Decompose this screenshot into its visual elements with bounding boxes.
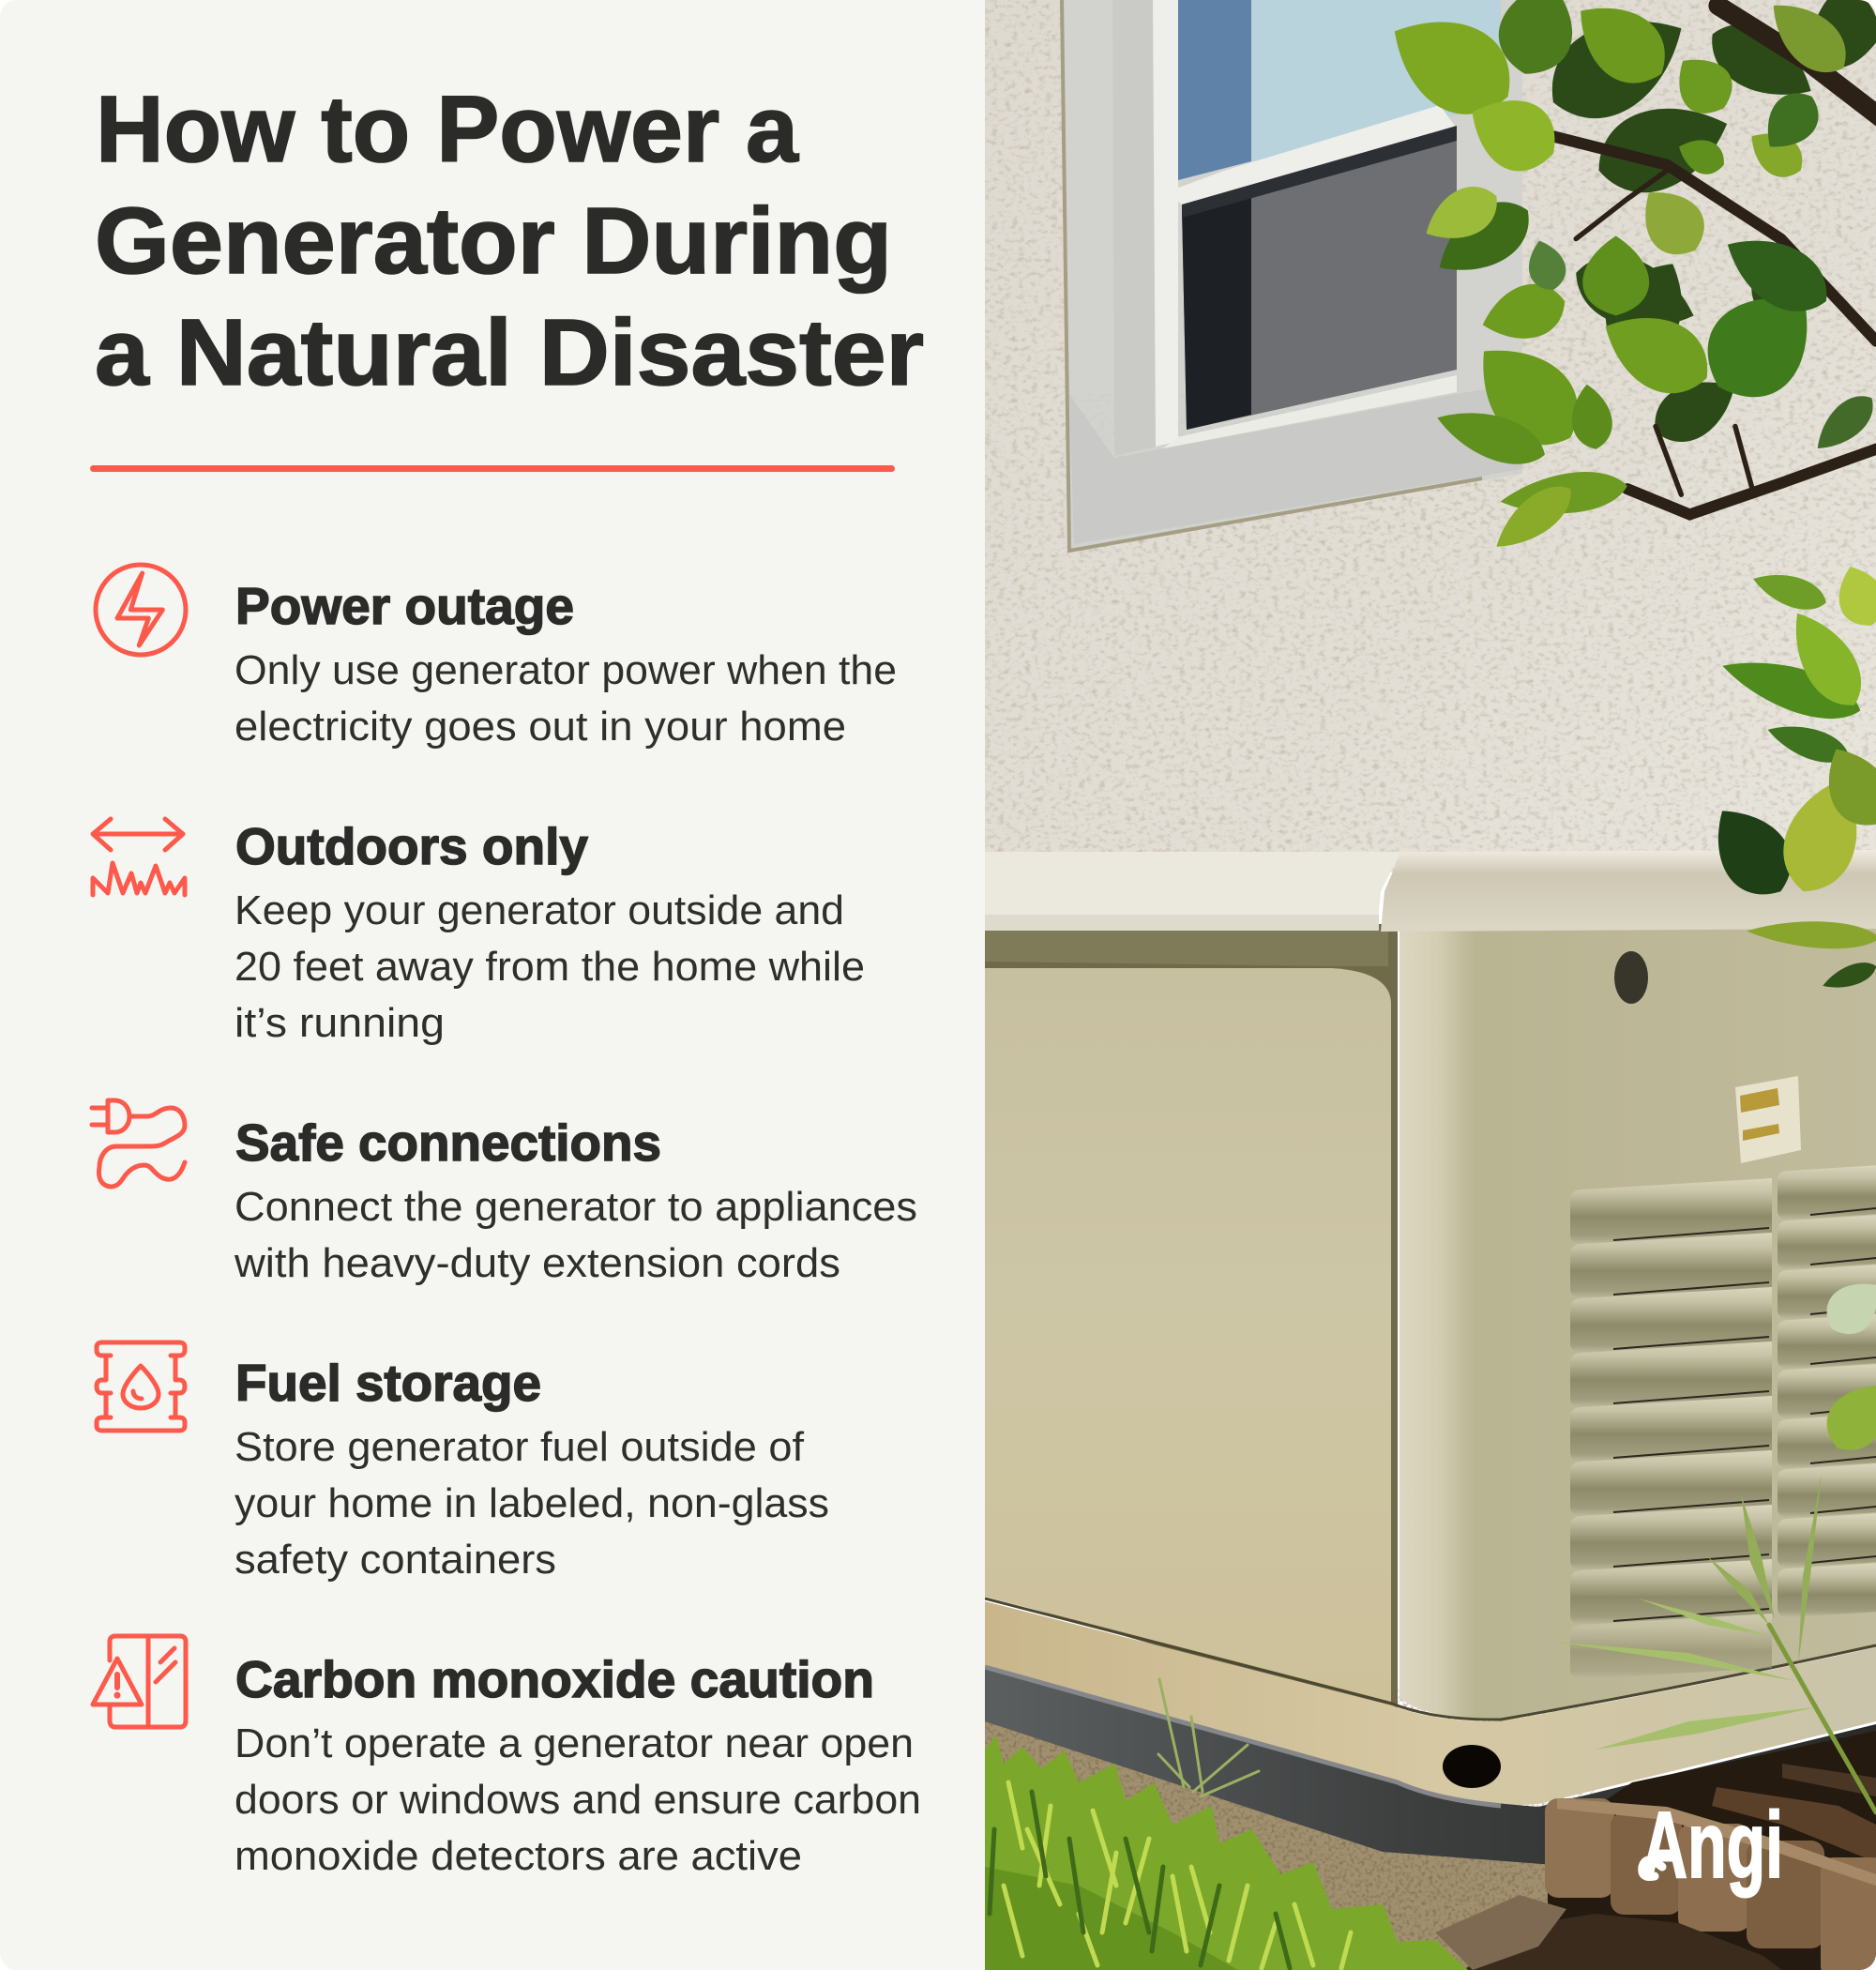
- icon: lightning bolt in circle: [96, 565, 186, 655]
- item: carbon monoxide caution: [93, 1636, 921, 1879]
- photo: dirt ground: [985, 1689, 1595, 1970]
- logo: Angi: Angi: [1642, 1793, 1783, 1898]
- title: How to Power a: [96, 77, 799, 182]
- text: safe connections description: [234, 1184, 917, 1286]
- text: outdoors only description: Keep your generator outside and: [234, 887, 844, 933]
- title: Generator During: [95, 189, 892, 294]
- item: fuel storage: [97, 1342, 829, 1583]
- text: carbon monoxide description: monoxide detectors are active: [234, 1833, 802, 1879]
- text: outdoors only description: [234, 887, 865, 1046]
- text: safe connections description: Connect the generator to appliances: [234, 1184, 917, 1230]
- photo: small grass plant: [1158, 1679, 1259, 1796]
- branches: [1553, 6, 1876, 514]
- icon: fuel barrel with drop: [97, 1342, 185, 1431]
- heading: carbon monoxide caution: Carbon monoxide caution: [235, 1650, 874, 1708]
- text: fuel storage description: safety containers: [234, 1537, 556, 1583]
- text: outdoors only description: it’s running: [234, 1000, 445, 1046]
- title divider rule: [90, 465, 895, 472]
- icon: distance arrow over ground: [93, 819, 185, 895]
- photo: tree leaves and branches: [1373, 0, 1876, 995]
- photo: window: [1062, 0, 1522, 551]
- heading: safe connections: Safe connections: [235, 1114, 661, 1172]
- panel: text column background: [0, 0, 985, 1970]
- photo: retaining blocks: [1435, 1731, 1876, 1970]
- text: power outage description: [234, 647, 897, 750]
- leaves: [1373, 0, 1876, 995]
- text: carbon monoxide description: doors or windows and ensure carbon: [234, 1777, 921, 1823]
- title: [97, 96, 923, 386]
- title: a Natural Disaster: [95, 300, 924, 405]
- text: fuel storage description: [234, 1424, 829, 1583]
- item: power outage: [96, 565, 897, 750]
- heading: fuel storage: Fuel storage: [235, 1354, 541, 1412]
- icon: plug and cord: [92, 1100, 185, 1187]
- back foliage shadow leaves: [1532, 0, 1876, 455]
- logo: Angi: [1642, 1793, 1783, 1898]
- heading: power outage: Power outage: [235, 577, 574, 635]
- photo: generator vents: [1570, 1165, 1876, 1679]
- photo: tall grass plant: [1553, 1474, 1876, 1812]
- text: power outage description: electricity goes out in your home: [234, 704, 846, 750]
- item: outdoors only: [93, 817, 865, 1046]
- text: fuel storage description: your home in labeled, non-glass: [234, 1480, 829, 1526]
- photo: generator enclosure: [985, 850, 1876, 1869]
- text: carbon monoxide description: Don’t operate a generator near open: [234, 1720, 914, 1766]
- photo: generator beside a house: [985, 0, 1876, 1970]
- photo: lawn grass: [985, 1735, 1468, 1970]
- icon: window with warning triangle: [93, 1636, 186, 1727]
- item: safe connections: [92, 1100, 917, 1286]
- text: power outage description: Only use generator power when the: [234, 647, 897, 693]
- text: safe connections description: with heavy-duty extension cords: [234, 1240, 840, 1286]
- text: fuel storage description: Store generator fuel outside of: [234, 1424, 805, 1470]
- text: carbon monoxide description: [234, 1720, 921, 1879]
- text: outdoors only description: 20 feet away from the home while: [234, 944, 865, 990]
- photo: stucco wall: [985, 0, 1876, 872]
- photo: vine leaves over generator: [1815, 1268, 1876, 1462]
- heading: outdoors only: Outdoors only: [235, 817, 588, 875]
